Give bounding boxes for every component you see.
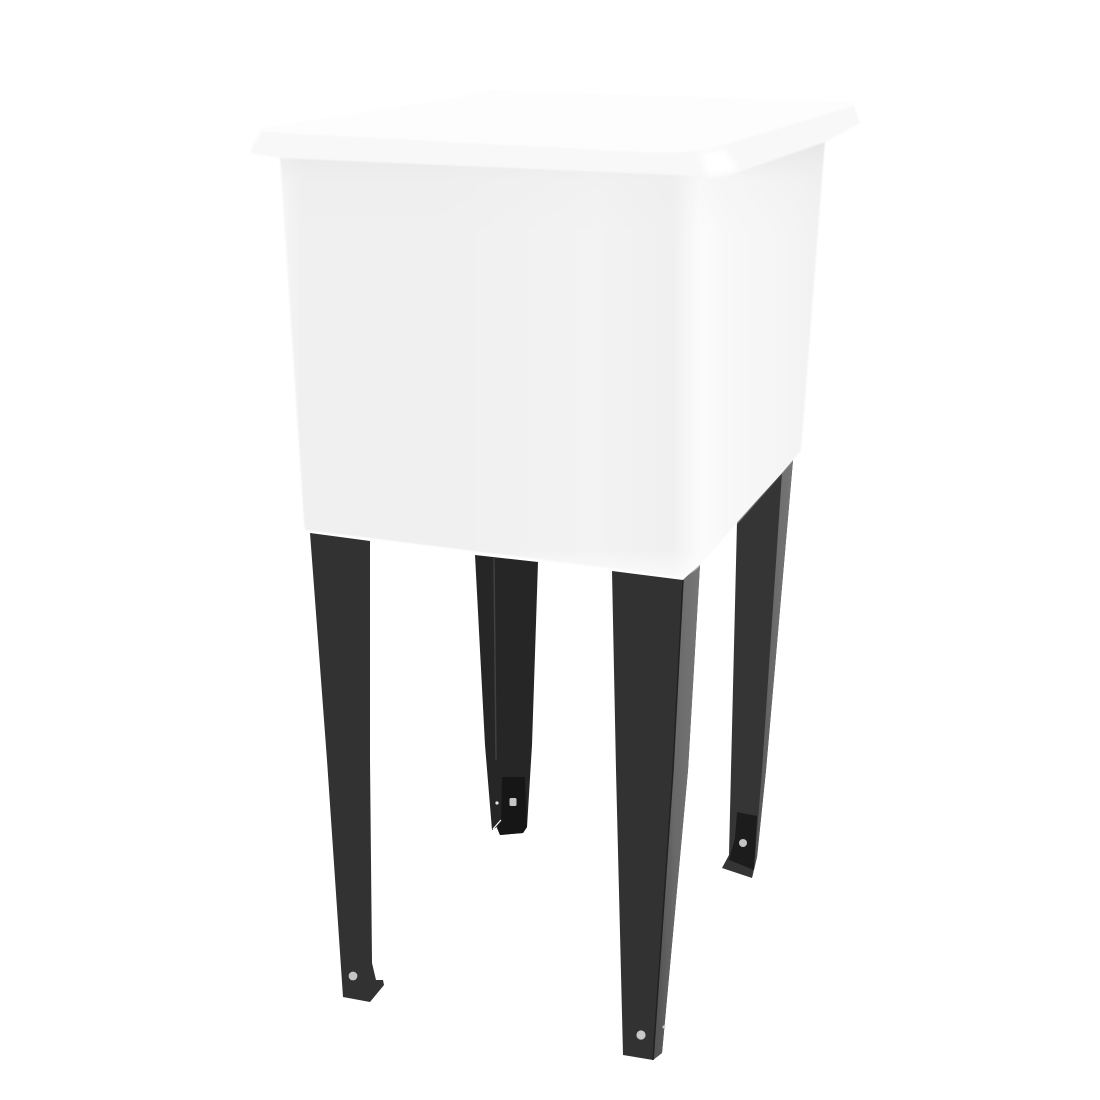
basin interior: [250, 90, 860, 177]
sink tub body: [280, 140, 825, 577]
rim corner highlight: [700, 148, 738, 175]
sink rim and basin opening: [250, 90, 860, 177]
front leg: [612, 564, 700, 1060]
back-middle leg: [475, 555, 538, 835]
front-left leg: [310, 533, 384, 1002]
back-right leg: [722, 460, 793, 878]
rim front lip: [252, 106, 860, 177]
